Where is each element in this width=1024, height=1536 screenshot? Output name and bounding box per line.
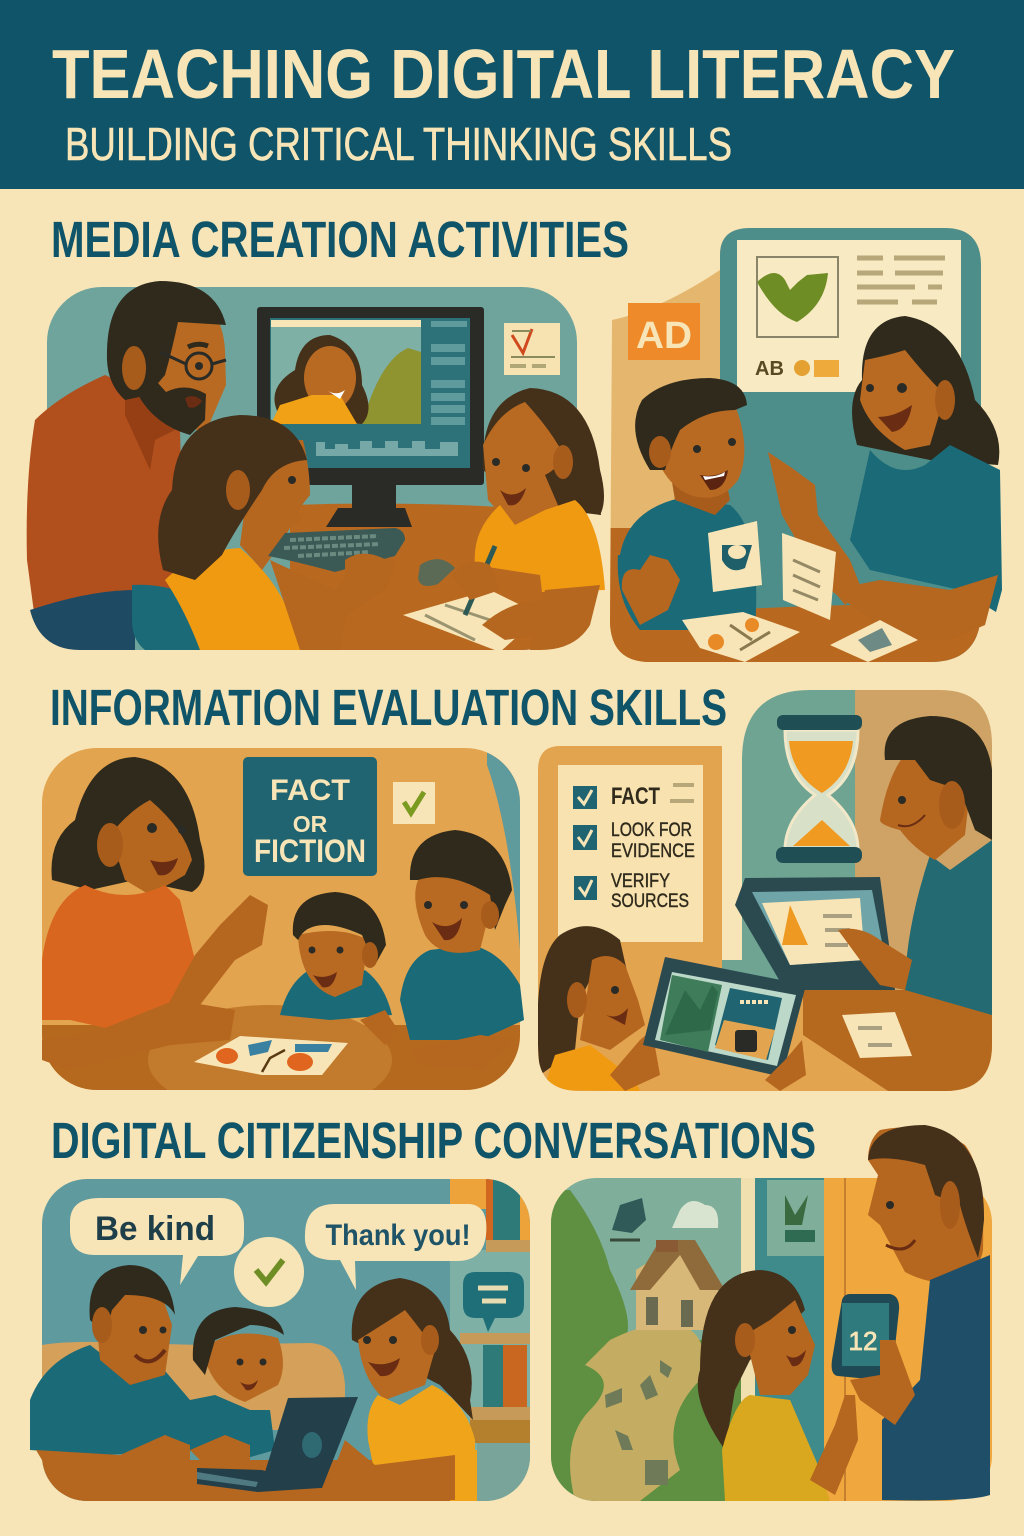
icon: mouse bbox=[418, 559, 455, 586]
game board on table bbox=[194, 1036, 348, 1075]
woman gesturing bbox=[42, 757, 268, 1070]
icon: phone: 12 bbox=[849, 1326, 877, 1356]
tablet: articles bbox=[643, 957, 806, 1091]
sign: fact or fiction bbox=[243, 757, 377, 876]
check item: look for evidence: LOOK FOR bbox=[611, 820, 692, 841]
bookshelf bbox=[450, 1179, 530, 1501]
subtitle: BUILDING CRITICAL THINKING SKILLS bbox=[65, 118, 732, 170]
tablet: warning sign bbox=[735, 877, 912, 990]
woman bbox=[330, 1278, 475, 1500]
check item: verify sources: SOURCES bbox=[611, 891, 689, 912]
icon: laptop bbox=[197, 1397, 358, 1492]
sign: fact or fiction: FICTION bbox=[254, 833, 366, 869]
speech bubble: be kind bbox=[70, 1198, 244, 1285]
check item: verify sources: VERIFY bbox=[611, 871, 670, 892]
boy bbox=[190, 1307, 284, 1475]
icon: phone bbox=[832, 1294, 915, 1425]
checklist bbox=[558, 765, 703, 942]
man bbox=[30, 1265, 205, 1490]
chair bbox=[132, 585, 220, 650]
check item: fact: FACT bbox=[611, 783, 660, 810]
speech bubble: be kind: Be kind bbox=[95, 1210, 215, 1248]
girl with tablet bbox=[538, 926, 660, 1091]
icon: computer monitor bbox=[257, 307, 484, 527]
man with phone bbox=[868, 1125, 990, 1500]
heading: digital citizenship: DIGITAL CITIZENSHIP CONVERSATIONS bbox=[51, 1112, 816, 1169]
note card with check bbox=[504, 323, 560, 375]
girl pointing bbox=[698, 1270, 858, 1501]
check item: look for evidence bbox=[573, 820, 695, 862]
header banner bbox=[0, 0, 1024, 189]
icon: keyboard bbox=[268, 528, 405, 593]
girl writing bbox=[475, 388, 605, 650]
panel: family on a laptop with speech bubbles bbox=[30, 1179, 530, 1501]
panel: family editing video at a computer bbox=[27, 281, 605, 652]
man pointing at tablet bbox=[880, 716, 992, 1015]
note with check bbox=[393, 782, 435, 824]
AD sign: AD bbox=[636, 315, 692, 357]
note on desk bbox=[842, 1012, 912, 1058]
poster bbox=[737, 240, 961, 392]
woman bbox=[768, 316, 1002, 640]
chat icon bbox=[463, 1272, 524, 1332]
small boy bbox=[280, 892, 392, 1020]
large boy bbox=[360, 830, 524, 1070]
check item: fact bbox=[573, 783, 694, 810]
window scene bbox=[551, 1178, 741, 1501]
girl at keyboard bbox=[158, 415, 395, 650]
poster: AB bbox=[755, 358, 784, 380]
panel: checklist, hourglass and tablets bbox=[538, 690, 992, 1091]
check item: look for evidence: EVIDENCE bbox=[611, 841, 695, 862]
sign: fact or fiction: FACT bbox=[270, 774, 350, 807]
check item: verify sources bbox=[574, 871, 689, 912]
check bubble bbox=[234, 1237, 304, 1307]
paper and pen bbox=[403, 546, 545, 652]
AD sign bbox=[628, 303, 700, 360]
cards in hand bbox=[708, 521, 836, 620]
boy bbox=[618, 378, 756, 630]
panel: looking at phone by a window bbox=[551, 1125, 992, 1501]
sign: fact or fiction: OR bbox=[293, 811, 328, 837]
cards on table bbox=[682, 612, 918, 662]
couch bbox=[42, 1342, 345, 1430]
heading: media creation: MEDIA CREATION ACTIVITIES bbox=[51, 211, 629, 268]
panel: fact or fiction discussion bbox=[42, 748, 524, 1115]
panel: parent and child sorting ad cards bbox=[610, 228, 1002, 668]
speech bubble: thank you bbox=[305, 1204, 486, 1290]
man with beard and glasses bbox=[27, 281, 226, 650]
heading: information evaluation: INFORMATION EVALUATION SKILLS bbox=[50, 679, 727, 736]
speech bubble: thank you: Thank you! bbox=[326, 1219, 470, 1252]
icon: hourglass bbox=[776, 715, 862, 863]
